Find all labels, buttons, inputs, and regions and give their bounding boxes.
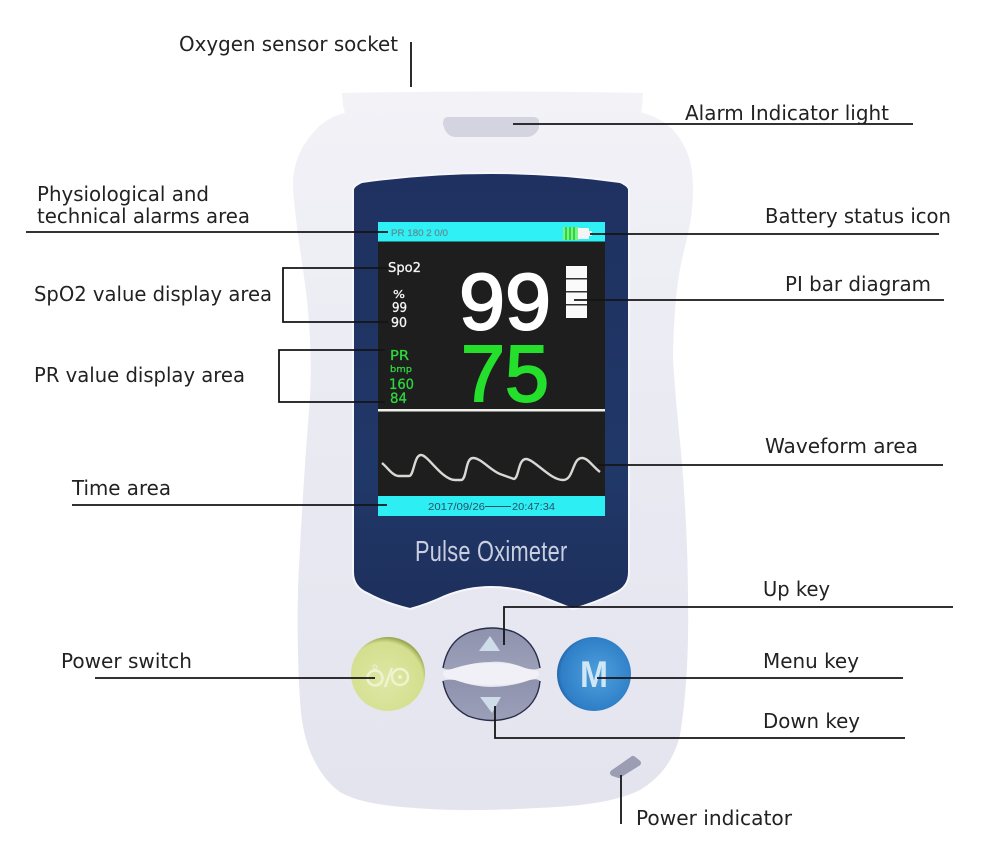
time bar: 2017/09/26 xyxy=(428,501,485,513)
PR labels xyxy=(389,349,414,407)
PI bar diagram xyxy=(566,266,587,318)
top status bar xyxy=(378,222,605,242)
label: physiological and technical alarms area: Physiological and xyxy=(37,182,209,206)
label: waveform area: Waveform area xyxy=(765,434,918,458)
label: down key: Down key xyxy=(763,709,860,733)
top status bar: PR 180 2 0/0 xyxy=(391,228,448,239)
SpO2 labels xyxy=(388,261,421,331)
time bar xyxy=(378,496,605,516)
SpO2 labels: Spo2 xyxy=(388,261,421,276)
SpO2 labels: 90 xyxy=(391,316,407,331)
navy front panel xyxy=(353,173,629,609)
waveform xyxy=(382,455,600,480)
SpO2 value: 99 xyxy=(459,257,551,346)
alarm indicator light xyxy=(443,117,539,137)
power indicator xyxy=(613,759,638,775)
power button xyxy=(351,637,425,711)
screen xyxy=(378,222,605,516)
pulse rate value: 75 xyxy=(461,329,549,418)
PR labels: PR xyxy=(390,349,409,364)
down key xyxy=(443,679,540,720)
label: battery status icon: Battery status icon xyxy=(765,204,951,228)
menu button: M xyxy=(580,654,608,695)
device body xyxy=(293,92,693,810)
product name: Pulse Oximeter xyxy=(415,536,568,568)
label: menu key: Menu key xyxy=(763,649,859,673)
menu button xyxy=(557,637,631,711)
icon: battery xyxy=(563,227,592,240)
PR labels: bmp xyxy=(390,365,412,375)
label: oxygen sensor socket: Oxygen sensor socket xyxy=(179,32,398,56)
PR labels: 160 xyxy=(389,377,414,393)
time bar: 20:47:34 xyxy=(512,501,555,513)
SpO2 labels: 99 xyxy=(392,301,407,316)
label: PI bar diagram: PI bar diagram xyxy=(785,272,931,296)
label: physiological and technical alarms area xyxy=(37,182,250,228)
up key xyxy=(443,628,540,670)
label: alarm indicator light: Alarm Indicator light xyxy=(685,101,889,125)
label: power switch: Power switch xyxy=(61,649,192,673)
label: PR value display area: PR value display area xyxy=(34,363,245,387)
label: time area: Time area xyxy=(71,476,171,500)
label: power indicator: Power indicator xyxy=(636,806,793,830)
PR labels: 84 xyxy=(390,391,407,407)
label: physiological and technical alarms area: technical alarms area xyxy=(37,204,250,228)
up and down key housing xyxy=(443,663,539,685)
label: SpO2 value display area: SpO2 value display area xyxy=(34,282,272,306)
SpO2 labels: % xyxy=(393,288,405,301)
label: up key: Up key xyxy=(763,577,830,601)
